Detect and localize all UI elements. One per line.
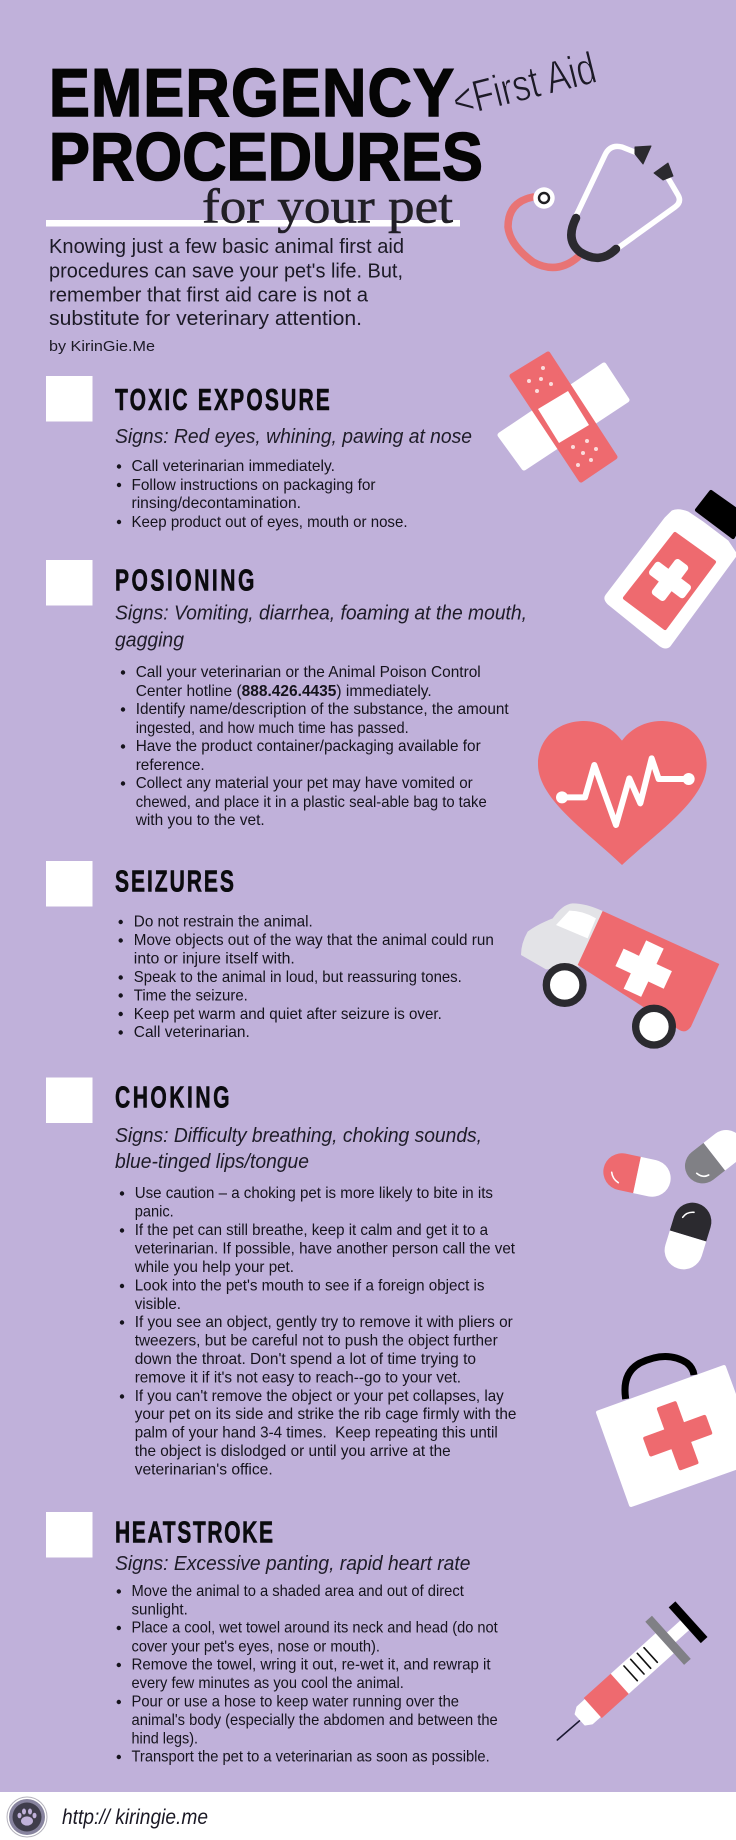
list: veterinarian. If possible, have another person call the vet	[135, 1241, 516, 1258]
list: Remove the towel, wring it out, re-wet it, and rewrap it	[132, 1657, 491, 1674]
list: your pet on its side and strike the rib cage firmly with the	[135, 1406, 516, 1423]
icon: heart with pulse	[538, 721, 707, 865]
list: If you see an object, gently try to remove it with pliers or	[135, 1314, 513, 1331]
list: Call your veterinarian or the Animal Poison Control	[136, 664, 481, 681]
list: Call veterinarian immediately.	[132, 458, 335, 475]
signs	[115, 1125, 482, 1173]
list: Time the seizure.	[134, 988, 248, 1004]
icon: stethoscope	[508, 146, 679, 267]
list: ingested, and how much time has passed.	[136, 720, 409, 737]
underline	[46, 220, 460, 226]
list: tweezers, but be careful not to push the object further	[135, 1333, 498, 1350]
list: Identify name/description of the substance, the amount	[136, 701, 509, 718]
list: Use caution – a choking pet is more likely to bite in its	[135, 1185, 493, 1202]
list	[120, 1185, 516, 1479]
panel: poisoning	[46, 560, 527, 829]
heading: HEATSTROKE	[115, 1514, 273, 1550]
list: panic.	[135, 1204, 174, 1221]
icon: medicine bottle	[605, 492, 736, 648]
title: procedures: PROCEDURES	[49, 118, 483, 195]
list: every few minutes as you cool the animal.	[132, 1675, 404, 1692]
list: rinsing/decontamination.	[132, 495, 301, 512]
list: Transport the pet to a veterinarian as soon as possible.	[132, 1749, 490, 1766]
panel: heatstroke	[46, 1512, 498, 1766]
heading: SEIZURES	[115, 863, 234, 899]
signs: blue-tinged lips/tongue	[115, 1151, 309, 1173]
list: chewed, and place it in a plastic seal-able bag to take	[136, 794, 487, 811]
list: remove it if it's not easy to reach--go to your vet.	[135, 1370, 461, 1387]
icon: bandage	[500, 354, 627, 480]
intro text	[49, 235, 404, 330]
list: Place a cool, wet towel around its neck and head (do not	[132, 1620, 498, 1637]
list: Call veterinarian.	[134, 1024, 250, 1041]
panel: toxic exposure	[46, 376, 472, 531]
panel: choking	[46, 1078, 516, 1479]
list: Move objects out of the way that the animal could run	[134, 932, 494, 949]
list: Keep pet warm and quiet after seizure is over.	[134, 1006, 442, 1023]
list: with you to the vet.	[135, 812, 265, 829]
title: emergency: EMERGENCY	[49, 54, 454, 131]
checkbox	[46, 1512, 92, 1558]
intro text: remember that first aid care is not a	[49, 284, 369, 306]
footer bar	[0, 1792, 736, 1840]
list: Keep product out of eyes, mouth or nose.	[132, 514, 408, 531]
list: Have the product container/packaging available for	[136, 738, 481, 755]
list: hind legs).	[132, 1730, 198, 1747]
list: cover your pet's eyes, nose or mouth).	[132, 1638, 380, 1655]
list	[117, 1583, 498, 1766]
heading: TOXIC EXPOSURE	[115, 382, 330, 417]
list: down the throat. Don't spend a lot of time trying to	[135, 1351, 476, 1368]
list: the object is dislodged or until you arrive at the	[135, 1443, 451, 1460]
checkbox	[46, 1078, 92, 1123]
list: Collect any material your pet may have vomited or	[136, 775, 473, 792]
intro text: substitute for veterinary attention.	[49, 307, 362, 330]
list	[121, 664, 509, 829]
list: while you help your pet.	[134, 1259, 294, 1276]
list	[117, 458, 408, 531]
signs: Signs: Red eyes, whining, pawing at nose	[115, 426, 472, 448]
website url: http:// kiringie.me	[62, 1806, 208, 1829]
list: If the pet can still breathe, keep it calm and get it to a	[135, 1222, 488, 1239]
icon: syringe	[557, 1598, 711, 1741]
list: sunlight.	[132, 1601, 188, 1618]
heading: POSIONING	[115, 562, 254, 598]
list: visible.	[135, 1296, 181, 1313]
icon: pills	[600, 1123, 736, 1274]
list: veterinarian's office.	[135, 1462, 273, 1479]
list: If you can't remove the object or your pet collapses, lay	[135, 1388, 504, 1405]
list: animal's body (especially the abdomen and between the	[132, 1712, 498, 1729]
signs: Signs: Difficulty breathing, choking sounds,	[115, 1125, 482, 1147]
list: Pour or use a hose to keep water running over the	[132, 1694, 459, 1711]
subtitle: for your pet: for your pet	[202, 178, 453, 234]
icon: ambulance	[521, 903, 719, 1045]
byline: by KirinGie.Me	[49, 338, 155, 355]
list: Move the animal to a shaded area and out of direct	[132, 1583, 464, 1600]
list: reference.	[136, 757, 205, 774]
header block	[46, 42, 601, 355]
signs: Signs: Excessive panting, rapid heart rate	[115, 1553, 470, 1575]
list: Follow instructions on packaging for	[132, 477, 376, 494]
intro text: procedures can save your pet's life. But,	[49, 260, 403, 282]
list: Look into the pet's mouth to see if a foreign object is	[135, 1278, 484, 1295]
icon: first aid kit	[598, 1356, 736, 1505]
handwritten tag: first aid: <First Aid	[447, 42, 601, 127]
list: Speak to the animal in loud, but reassuring tones.	[134, 969, 462, 986]
checkbox	[46, 560, 92, 606]
intro text: Knowing just a few basic animal first aid	[49, 235, 404, 258]
signs	[115, 602, 527, 652]
list	[118, 914, 494, 1041]
list: palm of your hand 3-4 times. Keep repeating this until	[135, 1425, 498, 1442]
list: into or injure itself with.	[134, 951, 295, 968]
panel: seizures	[46, 861, 494, 1041]
checkbox	[46, 376, 92, 422]
checkbox	[46, 861, 92, 906]
list: Center hotline (888.426.4435) immediately.	[136, 683, 432, 700]
signs: Signs: Vomiting, diarrhea, foaming at the mouth,	[115, 602, 527, 624]
list: Do not restrain the animal.	[134, 914, 313, 931]
signs: gagging	[115, 630, 184, 652]
heading: CHOKING	[115, 1079, 230, 1115]
icon: paw logo	[7, 1797, 47, 1837]
